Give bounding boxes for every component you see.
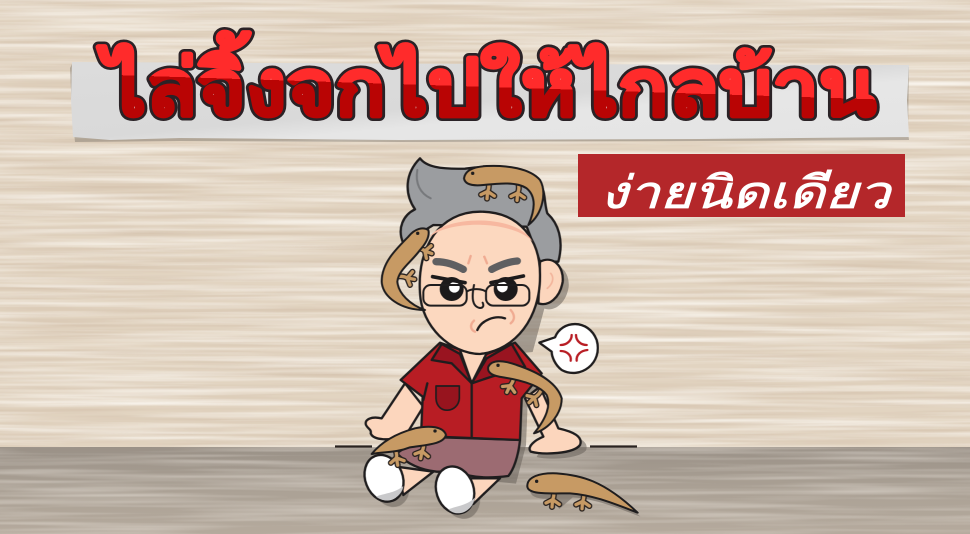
lizard on shoulder — [488, 361, 562, 433]
subtitle banner — [578, 154, 905, 218]
shirt — [401, 343, 542, 440]
frown wrinkles — [468, 256, 514, 332]
shoe soles — [376, 486, 475, 513]
wood floor — [0, 447, 970, 534]
socks and shoes — [358, 449, 480, 519]
lizard on floor — [527, 473, 638, 513]
shorts — [397, 437, 520, 477]
legs — [397, 467, 500, 504]
eyes — [433, 276, 523, 301]
torn paper strip — [70, 62, 909, 142]
illustration: angry old man with lizards — [358, 158, 640, 524]
ground lines — [335, 445, 637, 448]
eyebrows — [436, 261, 517, 269]
title: ไล่จิ้งจกไปให้ไกลบ้าน — [97, 31, 876, 132]
hair — [401, 158, 561, 262]
glasses — [423, 285, 529, 308]
mouth — [477, 317, 505, 330]
lizard on head — [382, 228, 434, 310]
head — [420, 212, 540, 354]
speech bubble with anger mark — [539, 324, 598, 373]
lizard on leg — [372, 427, 446, 467]
collar and neck — [460, 350, 487, 383]
title: ไล่จิ้งจกไปให้ไกลบ้าน — [97, 31, 876, 132]
character drop shadow — [364, 265, 640, 524]
arms and hands — [366, 383, 581, 453]
subtitle text: ง่ายนิดเดียว — [600, 167, 893, 218]
ear — [538, 260, 563, 304]
lizard on hair — [464, 166, 543, 225]
shirt pocket — [436, 386, 459, 410]
